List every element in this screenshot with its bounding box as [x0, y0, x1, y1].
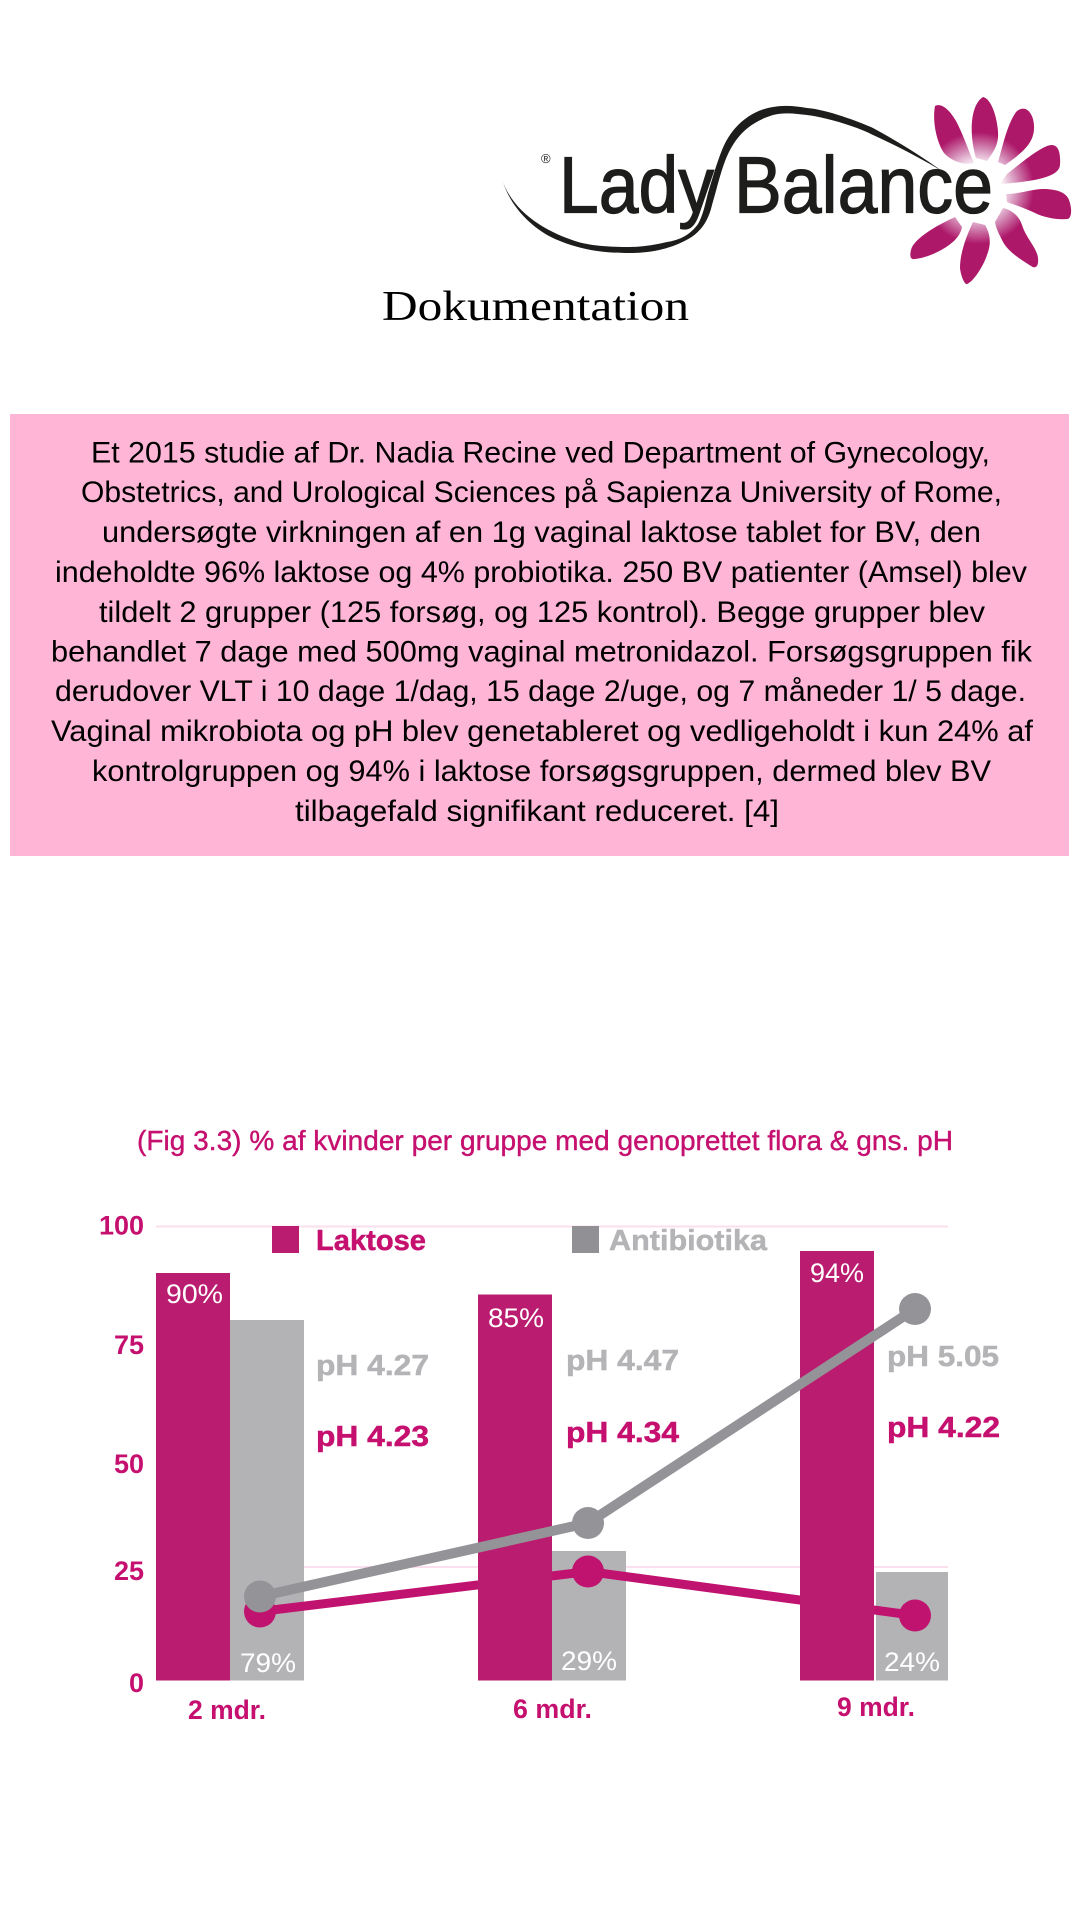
logo wordmark: ® — [541, 151, 551, 166]
bar value labels — [166, 1258, 940, 1678]
text block: study summary: Et 2015 studie af Dr. Nadia Recine ved Department of Gynecology, — [91, 436, 990, 470]
text block: study summary: Vaginal mikrobiota og pH blev genetableret og vedligeholdt i kun 24% af — [51, 715, 1034, 748]
text block: study summary: Obstetrics, and Urological Sciences på Sapienza University of Rome, — [81, 476, 1002, 509]
bars: Laktose — [156, 1251, 874, 1680]
heading: Dokumentation: Dokumentation — [382, 284, 689, 330]
pH labels: Antibiotika: pH 4.27 — [316, 1350, 429, 1382]
pH labels: Laktose — [316, 1412, 1000, 1453]
legend: Antibiotika — [609, 1225, 768, 1257]
bar value labels: 79% — [240, 1648, 296, 1678]
x axis labels: 2 mdr. — [188, 1695, 266, 1725]
pH labels: Laktose: pH 4.22 — [887, 1412, 1000, 1444]
text block: study summary: tildelt 2 grupper (125 forsøg, og 125 kontrol). Begge grupper blev — [99, 596, 985, 629]
chart title: (Fig 3.3) % af kvinder per gruppe med genoprettet flora & gns. pH — [137, 1125, 953, 1156]
logo: LadyBalance — [503, 97, 1071, 284]
logo wordmark — [541, 140, 993, 230]
icon: logo swoosh — [503, 106, 942, 253]
legend: Laktose — [316, 1225, 426, 1257]
text block: study summary: tilbagefald signifikant reduceret. [4] — [295, 795, 779, 828]
line: Laktose pH — [244, 1556, 931, 1632]
pH labels: Laktose: pH 4.34 — [566, 1417, 679, 1449]
y axis labels — [99, 1210, 144, 1698]
text block: study summary: derudover VLT i 10 dage 1/dag, 15 dage 2/uge, og 7 måneder 1/ 5 dage. — [55, 675, 1026, 708]
y axis labels: 0 — [129, 1668, 144, 1698]
icon: flower petals — [910, 97, 1071, 284]
bar value labels: 90% — [166, 1279, 223, 1309]
line: Antibiotika pH — [244, 1293, 931, 1612]
bar value labels: 94% — [810, 1258, 864, 1288]
text block: study summary: undersøgte virkningen af en 1g vaginal laktose tablet for BV, den — [102, 516, 981, 549]
x axis labels — [188, 1692, 915, 1725]
x axis labels: 6 mdr. — [513, 1694, 592, 1724]
pH labels: Laktose: pH 4.23 — [316, 1421, 429, 1453]
panel: study description — [10, 414, 1069, 856]
text block: study summary — [51, 436, 1034, 828]
logo wordmark: Lady — [559, 140, 714, 230]
y axis labels: 50 — [114, 1449, 144, 1479]
legend — [272, 1225, 768, 1257]
bars: Antibiotika — [230, 1320, 948, 1680]
Laktose bar sections covering the line — [478, 1555, 874, 1620]
text block: study summary: indeholdte 96% laktose og 4% probiotika. 250 BV patienter (Amsel) blev — [55, 556, 1027, 589]
y axis labels: 75 — [114, 1330, 144, 1360]
pH labels: Antibiotika — [316, 1341, 999, 1382]
bar value labels: 24% — [884, 1647, 940, 1677]
text block: study summary: behandlet 7 dage med 500mg vaginal metronidazol. Forsøgsgruppen fik — [51, 636, 1032, 668]
logo wordmark: Balance — [734, 140, 993, 230]
bar value labels: 29% — [561, 1646, 617, 1676]
pH labels: Antibiotika: pH 4.47 — [566, 1345, 679, 1377]
bar value labels: 85% — [488, 1303, 544, 1333]
y axis labels: 100 — [99, 1210, 144, 1240]
text block: study summary: kontrolgruppen og 94% i laktose forsøgsgruppen, dermed blev BV — [92, 755, 991, 788]
chart: flora and pH by group — [99, 1210, 1000, 1725]
pH labels: Antibiotika: pH 5.05 — [887, 1341, 999, 1373]
x axis labels: 9 mdr. — [837, 1692, 915, 1722]
y axis labels: 25 — [114, 1556, 144, 1586]
